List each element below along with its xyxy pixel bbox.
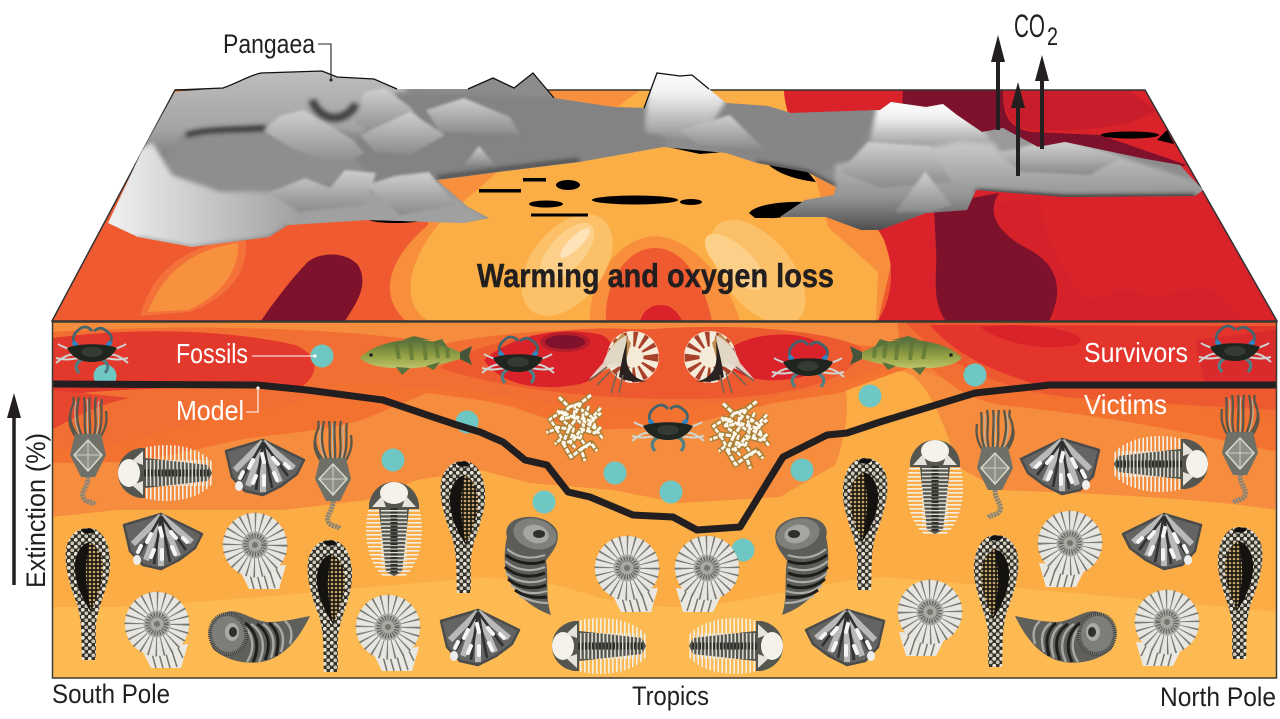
icon: ammonite 7 — [1038, 511, 1102, 587]
icon: ammonite 8 — [1135, 590, 1199, 666]
label: Pangaea with leader — [223, 29, 332, 82]
icon: brachiopod 1 — [226, 440, 304, 495]
axis label: South Pole: South Pole — [52, 679, 170, 709]
victims: horn corals — [206, 514, 1119, 663]
icon: crinoid 2 — [315, 421, 351, 529]
icon: cystoid 4 — [843, 458, 887, 590]
icon: cystoid 3 — [441, 461, 485, 593]
icon: crab 2 — [482, 337, 554, 383]
icon: trilobite 1 — [118, 448, 214, 498]
icon: brachiopod 2 — [124, 514, 202, 569]
label: CO2: CO — [1014, 8, 1045, 44]
label: CO2: 2 — [1047, 23, 1058, 51]
panel: top map surface — [40, 85, 1280, 341]
axis: Extinction (%) arrow and label — [7, 393, 51, 588]
icon: trilobite 2 — [1112, 439, 1208, 489]
axis: Extinction (%) arrow and label: Extinction (%) — [21, 433, 51, 588]
survivors: crabs, fish, nautilus and coral — [56, 326, 1271, 469]
icon: cystoid 5 — [974, 535, 1018, 667]
icon: fish right — [850, 336, 962, 375]
icon: cystoid 6 — [1218, 527, 1262, 659]
label: Model with leader: Model — [176, 395, 244, 426]
icon: crinoid 4 — [1222, 395, 1258, 503]
axis label: Tropics: Tropics — [632, 681, 709, 711]
icon: horn coral 4 — [773, 514, 828, 615]
icon: ammonite 4 — [595, 536, 659, 612]
arrow: CO2 left — [991, 35, 1005, 130]
label: Fossils with leader: Fossils — [176, 338, 248, 369]
victims: cystoids — [66, 458, 1262, 672]
landmass: Pangaea — [108, 70, 1203, 247]
icon: brachiopod 3 — [441, 610, 519, 665]
icon: cystoid 1 — [66, 528, 110, 660]
victims: trilobites — [118, 439, 1208, 671]
victims: ammonites — [125, 511, 1199, 671]
icon: brachiopod 4 — [806, 610, 884, 665]
label: Survivors: Survivors — [1084, 337, 1188, 368]
label: Fossils with leader — [176, 338, 317, 369]
icon: crab 3 — [772, 341, 844, 387]
icon: crab 4 — [632, 405, 704, 451]
icon: trilobite 3 — [552, 621, 648, 671]
islands and coastal shadows — [368, 130, 1174, 223]
icon: crinoid 1 — [70, 397, 106, 505]
icon: trilobite 4 — [687, 621, 783, 671]
icon: crab 5 — [1199, 326, 1271, 372]
label: Warming and oxygen loss: Warming and oxygen loss — [477, 257, 834, 294]
icon: nautilus right — [684, 331, 754, 393]
label: Pangaea with leader: Pangaea — [223, 29, 316, 59]
icon: ammonite 5 — [675, 536, 739, 612]
icon: ammonite 3 — [356, 595, 420, 671]
icon: ammonite 6 — [898, 580, 962, 656]
icon: horn coral 3 — [505, 514, 560, 615]
icon: coral left — [546, 395, 602, 461]
icon: coral right — [710, 401, 769, 469]
data dots: fossil extinction record — [94, 344, 986, 562]
arrows: CO2 release — [991, 35, 1049, 176]
label: Victims: Victims — [1084, 389, 1167, 420]
icon: trilobite 6 — [910, 440, 960, 536]
chart line: model extinction curve — [52, 384, 1277, 530]
icon: ammonite 2 — [125, 592, 189, 668]
icon: horn coral 2 — [1015, 610, 1119, 663]
icon: ammonite 1 — [223, 513, 287, 589]
icon: crinoid 3 — [977, 410, 1013, 518]
icon: crab 1 — [56, 327, 128, 373]
icon: brachiopod 5 — [1021, 439, 1099, 494]
icon: cystoid 2 — [308, 540, 352, 672]
icon: fish left — [360, 336, 472, 375]
icon: horn coral 1 — [206, 610, 310, 663]
icon: nautilus left — [589, 331, 659, 393]
victims: brachiopods — [124, 439, 1201, 665]
arrow: CO2 right — [1035, 55, 1049, 149]
icon: brachiopod 6 — [1123, 514, 1201, 569]
arrow: CO2 middle — [1011, 82, 1025, 176]
panel: front cross section — [52, 322, 1277, 678]
icon: trilobite 5 — [369, 482, 419, 578]
victims: crinoids — [70, 395, 1258, 529]
outline of the front face — [52, 322, 1276, 678]
